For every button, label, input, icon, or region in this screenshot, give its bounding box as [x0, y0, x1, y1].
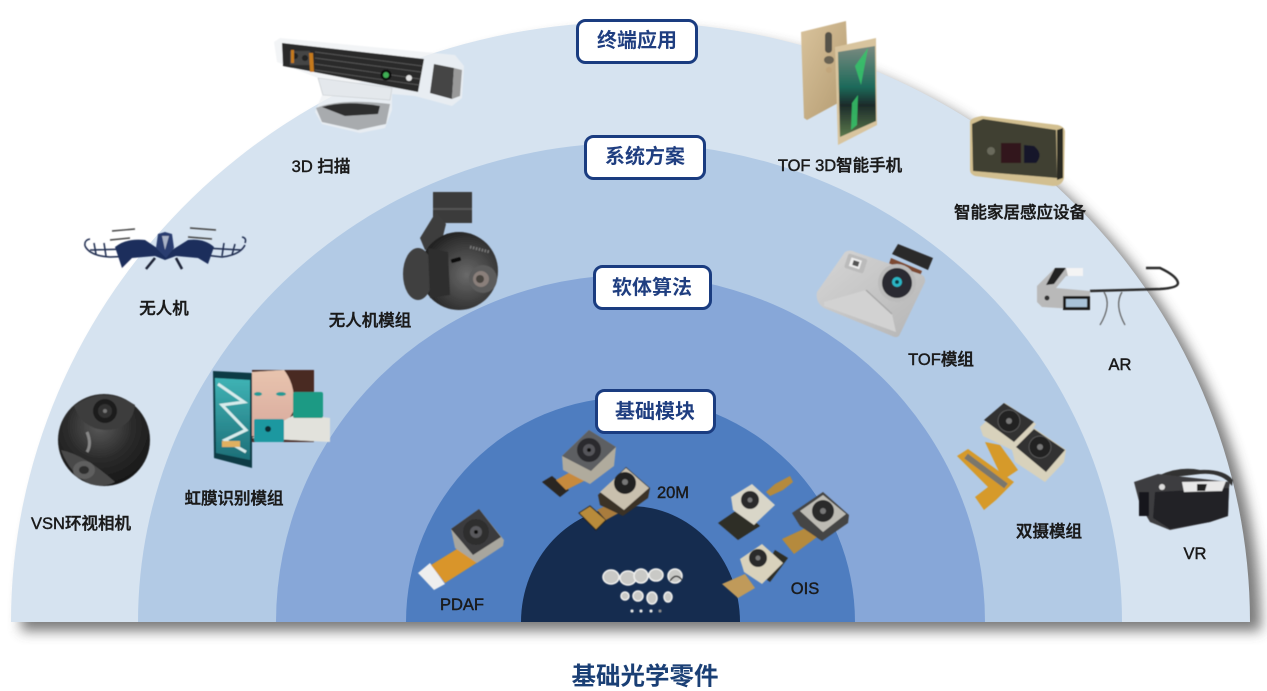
- layer: 基础光学零件: [521, 506, 740, 622]
- heading: 软体算法: [594, 266, 710, 308]
- label: AR: AR: [1109, 356, 1132, 374]
- label: 虹膜识别模组: 虹膜识别模组: [184, 489, 284, 508]
- heading: 系统方案: [586, 136, 704, 178]
- icon: iris recognition phone: [213, 370, 330, 468]
- label: TOF模组: TOF模组: [908, 350, 974, 369]
- heading: 基础模块: 基础模块: [615, 400, 695, 423]
- icon: VSN panoramic camera: [58, 394, 150, 486]
- heading: 终端应用: [578, 20, 696, 62]
- heading: 软体算法: 软体算法: [612, 276, 692, 299]
- icon: optical lenses: [603, 569, 682, 613]
- icon: TOF module: [817, 244, 933, 337]
- icon: dual camera module: [957, 403, 1066, 510]
- label: VR: VR: [1184, 545, 1207, 563]
- icon: PDAF camera module: [418, 509, 504, 590]
- title: 基础光学零件: 基础光学零件: [572, 662, 718, 690]
- icon: AR glasses: [1037, 268, 1178, 325]
- label: 20M: 20M: [657, 484, 689, 502]
- label: OIS: OIS: [791, 580, 819, 598]
- layer: 软体算法: [276, 275, 985, 622]
- label: PDAF: PDAF: [440, 596, 484, 614]
- icon: 20M camera modules: [542, 430, 650, 530]
- icon: drone camera gimbal: [403, 192, 498, 310]
- label: 双摄模组: 双摄模组: [1016, 522, 1082, 541]
- heading: 基础模块: [596, 390, 714, 432]
- label: 3D 扫描: 3D 扫描: [292, 157, 350, 176]
- label: TOF 3D智能手机: TOF 3D智能手机: [778, 156, 903, 175]
- layer: 系统方案: [138, 143, 1122, 622]
- icon: smart home sensor: [970, 116, 1065, 186]
- label: 无人机: 无人机: [139, 299, 189, 318]
- label: 智能家居感应设备: 智能家居感应设备: [954, 202, 1086, 222]
- icon: 3D scanner: [274, 38, 464, 133]
- label: 无人机模组: 无人机模组: [329, 311, 411, 330]
- label: VSN环视相机: VSN环视相机: [31, 514, 131, 533]
- heading: 系统方案: 系统方案: [605, 144, 685, 168]
- icon: TOF 3D smartphone: [801, 21, 877, 145]
- heading: 终端应用: 终端应用: [597, 28, 677, 52]
- layer: 基础模块: [406, 397, 855, 622]
- icon: VR headset: [1134, 469, 1233, 530]
- icon: drone: [85, 228, 246, 269]
- icon: OIS camera modules: [718, 476, 849, 598]
